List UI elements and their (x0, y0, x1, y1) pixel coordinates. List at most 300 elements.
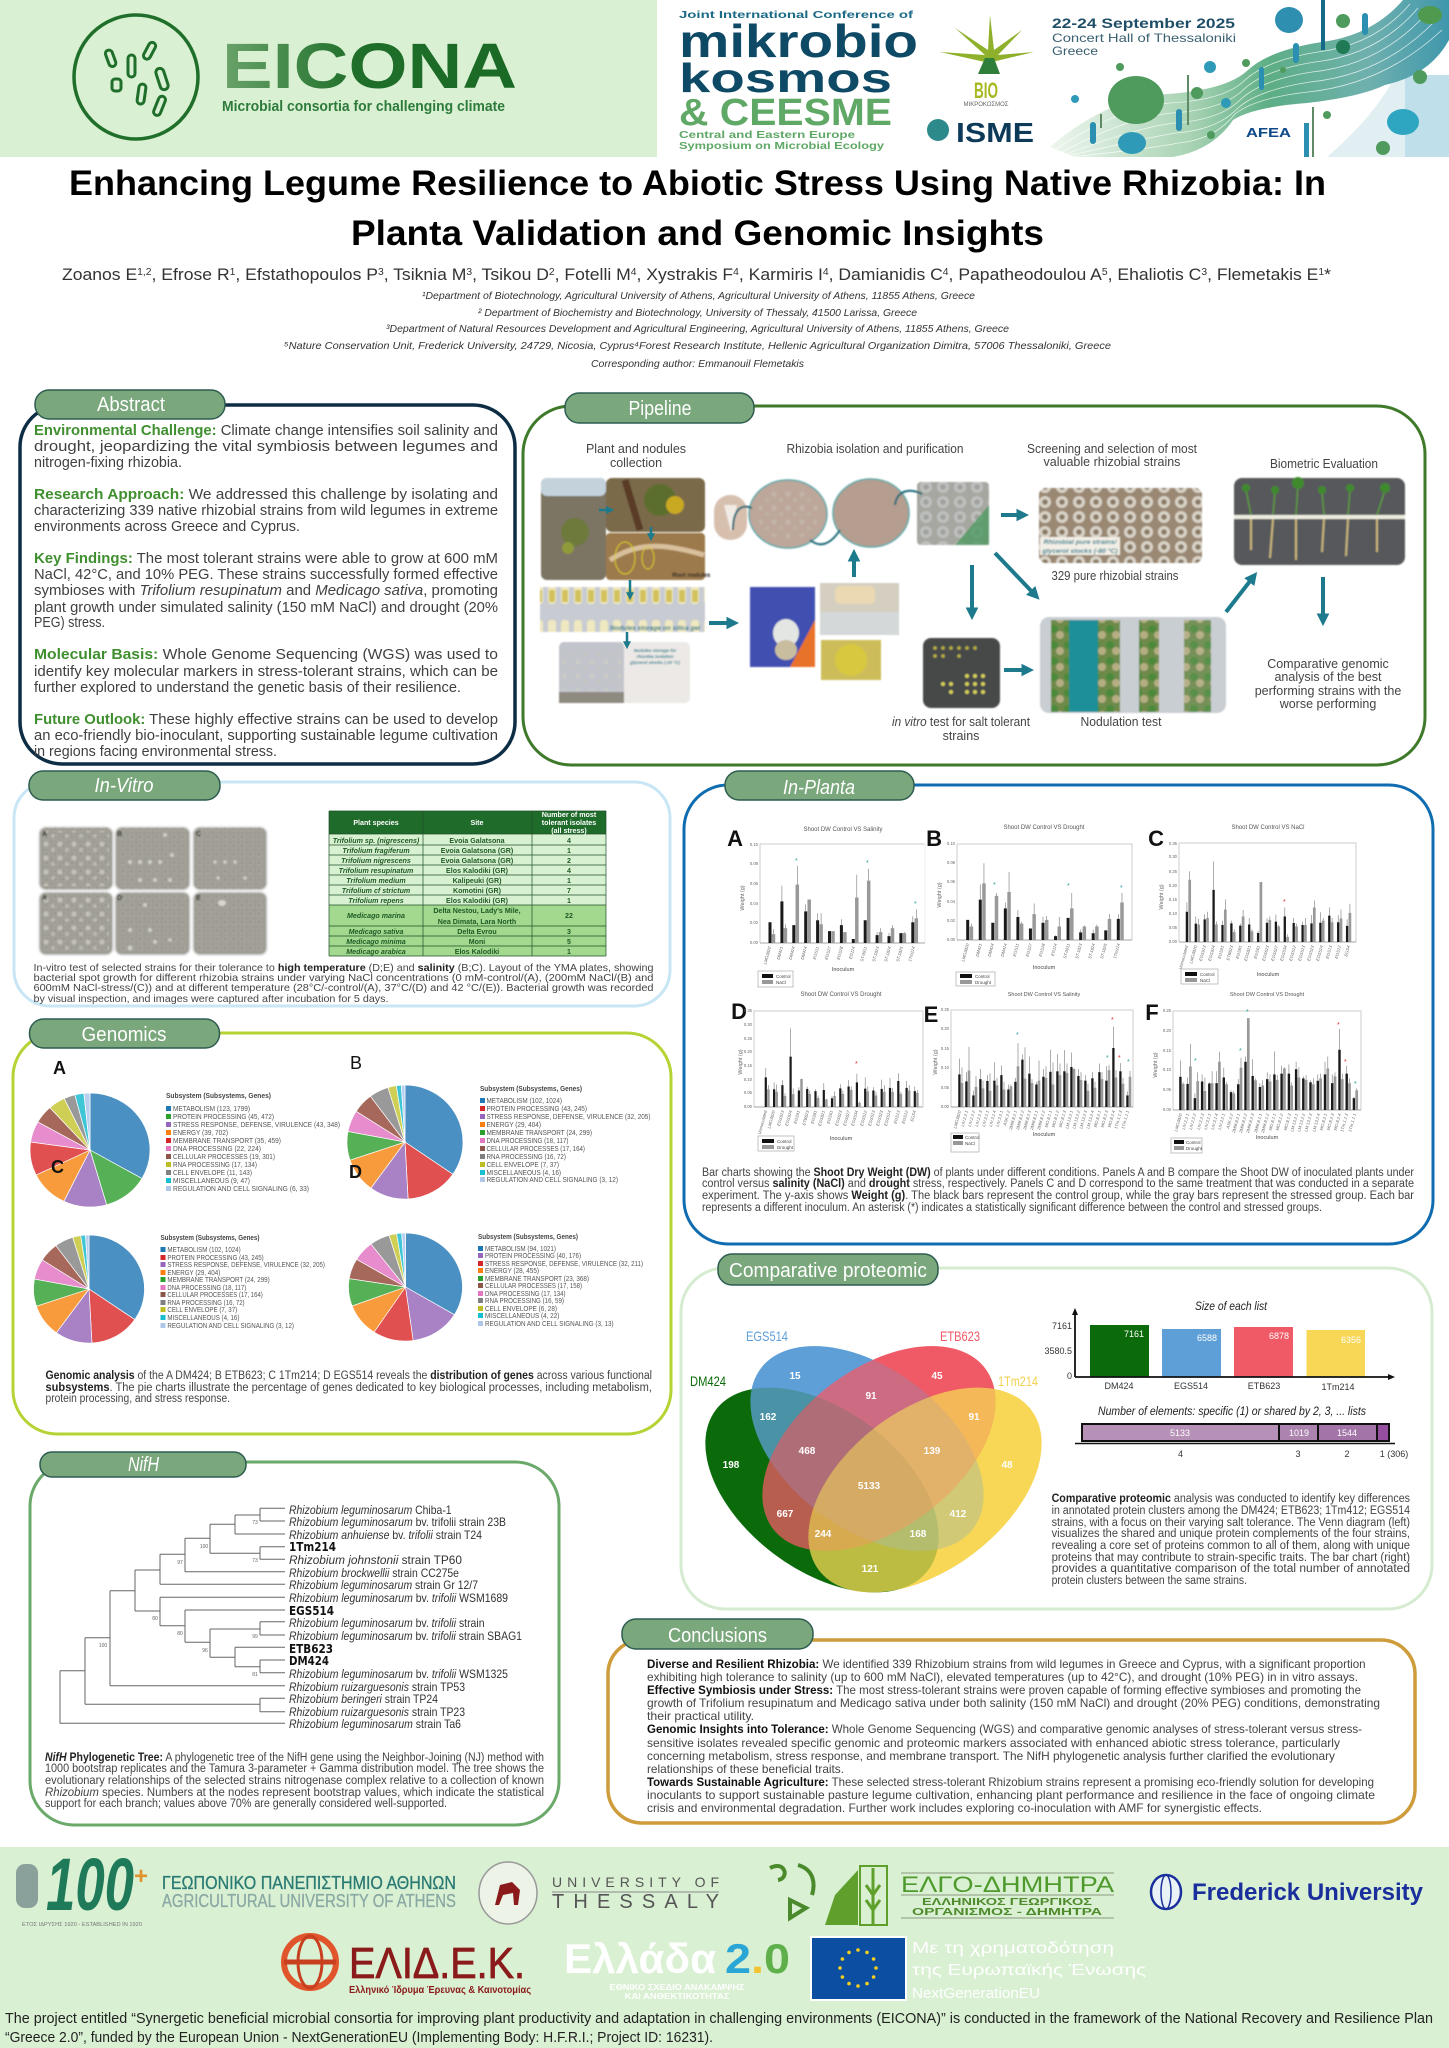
legend D: Subsystem (Subsystems, Genes) (478, 1234, 578, 1241)
table: tolerant isolates: Kalipeuki (GR) (453, 877, 502, 885)
bar chart A: EGS27 (824, 945, 832, 960)
conference name text: kosmos (679, 55, 892, 101)
stacked bar: shared elements: 1 (306) (1380, 1449, 1408, 1459)
authors: , Xystrakis F (637, 265, 733, 284)
bootstrap values: 99 (252, 1634, 258, 1640)
table: tolerant isolates: 3 (567, 928, 571, 936)
authors: , Fotelli M (555, 265, 631, 284)
bar chart C: EGS627 (1270, 944, 1279, 962)
bar chart F: 1Tm.1.1.3 (1339, 1112, 1349, 1132)
caption: in-planta: represents a different inoculum. An asterisk (*) indicates a statistically significant difference between the control and stressed groups. (702, 1202, 1322, 1214)
abstract text: drought, jeopardizing the vital symbiosis between legumes and (34, 438, 498, 455)
bar chart A: 0.02 (750, 920, 759, 925)
icon: mikrobiokosmos plant logo: BIO (974, 78, 998, 103)
bar chart D: 0.25 (744, 1036, 753, 1041)
heading: in-planta (725, 771, 914, 800)
bar chart C: Inoculum (1257, 972, 1280, 978)
authors: , Flemetakis E (1207, 265, 1318, 284)
tree taxa labels: 1Tm214 (289, 1540, 336, 1554)
venn diagram: DM424 (690, 1373, 726, 1389)
step label: plant and nodules collection: Plant and nodules (586, 442, 686, 456)
bar chart B: Control (975, 974, 990, 979)
bar chart E: 2MM.8.1.2 (1036, 1109, 1046, 1131)
label: comparative genomic analysis: Comparative genomic (1267, 657, 1389, 671)
conference date and place (1052, 15, 1292, 140)
affiliations: ¹Department of Biotechnology, Agricultural University of Athens, Agricultural University of Athens, 11855 Athens, Greece (422, 290, 975, 302)
bar chart B (926, 825, 1132, 986)
heading: in-vitro: In-Vitro (94, 775, 154, 797)
bar chart F: LIV.2.2.2 (1188, 1112, 1197, 1130)
bar chart: size of each list: 1Tm214 (1321, 1382, 1355, 1392)
venn diagram: 15 (789, 1371, 801, 1382)
affiliations: ⁵Nature Conservation Unit, Frederick University, 24729, Nicosia, Cyprus⁴Forest Research Institute, Hellenic Agricultural Organization Dimitra, 57006 Thessaloniki, Greece (284, 340, 1111, 352)
table: tolerant isolates: 1 (567, 877, 571, 885)
phylogenetic tree branches (60, 1508, 285, 1723)
bar chart F: LIV.3.2.1 (1217, 1113, 1226, 1130)
logo: Greece 2.0: Ελλάδα (564, 1935, 716, 1982)
caption: comparative proteomic: revealing a core set of proteins common to all of them, along with unique (1052, 1540, 1410, 1552)
bar chart C: EGS12 (1334, 944, 1342, 959)
bar chart: size of each list: ETB623 (1248, 1381, 1280, 1391)
bar chart B: EGS28 (1038, 942, 1046, 957)
bar chart E: LIV.3.1.4 (988, 1109, 997, 1127)
legend B: MISCELLANEOUS (4, 16) (486, 1170, 561, 1177)
caption: in-vitro: bacterial spot growth for different rhizobia strains under varying NaCl concentrations (0 mM-control/(A), (200mM NaCl/(B) and (34, 972, 654, 984)
caption: nifH: evolutionary relationships of the selected strains nitrogenase complex relative to a collection of known (45, 1775, 544, 1787)
decorative wave (1050, 0, 1449, 157)
bar chart B: DM424 (987, 942, 995, 957)
authors: 3 (1201, 267, 1208, 278)
step label: plant and nodules collection (586, 442, 686, 470)
venn diagram: 412 (950, 1509, 967, 1520)
bar chart F: 0.25 (1163, 1008, 1172, 1013)
photos: isolation (750, 583, 899, 680)
table: tolerant isolates: 1 (567, 897, 571, 905)
caption: in-vitro (34, 962, 654, 1005)
bar chart F: * (1354, 1081, 1357, 1088)
logo: Agricultural University of Athens: + (134, 1863, 148, 1890)
abstract text: plant growth under simulated salinity (150 mM NaCl) and drought (20% (34, 599, 498, 616)
label: nodulation test: Nodulation test (1080, 715, 1162, 729)
abstract text: symbioses with Trifolium resupinatum and Medicago sativa, promoting (34, 582, 498, 599)
bootstrap values: 80 (152, 1616, 158, 1622)
bar chart F: MO.8.1.2 (1275, 1112, 1284, 1131)
legend A: ENERGY (39, 702) (173, 1130, 228, 1137)
icon: mikrobiokosmos plant logo: ΜΙΚΡΟΚΟΣΜΟΣ (964, 102, 1009, 108)
legend C: ENERGY (29, 404) (167, 1270, 220, 1277)
bar chart E: 2MM.8.2.3 (1022, 1109, 1032, 1131)
bar chart E: 0.15 (941, 1046, 950, 1051)
bar chart D: 0.05 (744, 1090, 753, 1095)
caption: comparative proteomic: proteins that may contribute to strain-specific traits. The bar chart (right) (1052, 1552, 1410, 1564)
authors: , Efrose R (152, 265, 230, 284)
heading: comparative proteomic (718, 1254, 938, 1285)
bar chart C: EGS61 (1253, 945, 1261, 959)
title (69, 164, 1326, 253)
legend D: MEMBRANE TRANSPORT (23, 368) (485, 1276, 589, 1283)
legend B: RNA PROCESSING (16, 72) (486, 1154, 566, 1161)
bar chart D: EGS627 (842, 1109, 851, 1127)
bar chart D: EGS523 (875, 1109, 884, 1127)
bar chart E: LM.13.2.2 (1071, 1109, 1081, 1129)
table: tolerant isolates: Delta Nestou, Lady's Mile, (433, 907, 521, 915)
tree taxa labels: Rhizobium leguminosarum bv. trifolii strain (289, 1616, 484, 1630)
bar chart F: * (1194, 1058, 1197, 1065)
tree taxa labels: Rhizobium brockwellii strain CC275e (289, 1566, 459, 1580)
logo: EU NextGenerationEU flag: Με τη χρηματοδότηση (912, 1940, 1114, 1957)
photos: plant collection (541, 478, 711, 580)
bar chart F: LMG3820 (1173, 1112, 1183, 1132)
bar chart A: EG114 (848, 945, 856, 960)
bar chart D: Inoculum (830, 1136, 853, 1142)
bar chart F: LIV.3.1.1 (1203, 1113, 1212, 1130)
bar chart: size of each list: 7161 (1052, 1321, 1072, 1331)
conclusions text: crisis and environmental degradation. Further work includes exploring co-inoculation with AMF for synergistic effects. (647, 1801, 1262, 1815)
legend B: STRESS RESPONSE, DEFENSE, VIRULENCE (32, 205) (486, 1114, 650, 1121)
caption: comparative proteomic: in annotated protein clusters among the DM424; ETB623; 1Tm412; EGS514 (1052, 1505, 1411, 1517)
legend A: METABOLISM (123, 1799) (173, 1106, 250, 1113)
bar chart B: EGS11 (1012, 943, 1020, 957)
conclusions text: sensitive isolates revealed specific genomic and proteomic markers associated with enhanced abiotic stress tolerance, particularly (647, 1736, 1340, 1750)
bar chart F: Weight (g) (1153, 1052, 1159, 1078)
caption: in-planta: control versus salinity (NaCl) and drought stress, respectively. Panels C and D correspond to the same treatment that was conducted in a separate (702, 1178, 1414, 1190)
abstract text (34, 422, 498, 760)
legend B: DNA PROCESSING (18, 117) (486, 1138, 568, 1145)
bar chart F: MO.8.1.1 (1268, 1113, 1277, 1131)
legend D: DNA PROCESSING (17, 134) (485, 1291, 566, 1298)
bar chart B: * (1120, 885, 1123, 892)
table: tolerant isolates: Medicago marina (347, 912, 405, 920)
bar chart F (1145, 992, 1361, 1153)
bar chart A: 0.10 (750, 842, 759, 847)
bar chart E: 0.20 (941, 1026, 950, 1031)
bar chart A: ST-0911 (859, 946, 868, 962)
caption: nifH: 1000 bootstrap replicates and the Tamura 3-parameter + Gamma distribution model. The tree shows the (45, 1763, 544, 1775)
bar chart D: 0.20 (744, 1049, 753, 1054)
bar chart A: * (795, 858, 798, 865)
abstract text: Environmental Challenge: Climate change intensifies soil salinity and (34, 422, 498, 439)
legend B: CELL ENVELOPE (7, 37) (486, 1162, 559, 1169)
footer band with partner logos (0, 1843, 1449, 2048)
table: tolerant isolates: Evoia Galatsona (GR) (441, 857, 514, 865)
bar chart B: ST-0911 (1062, 943, 1071, 959)
bar chart F: MO.8.2.3 (1326, 1112, 1335, 1131)
photo: nodule tubes on silica gel: Nodules storage on silica gel (610, 625, 700, 632)
venn diagram: ETB623 (940, 1328, 980, 1344)
legend D: CELLULAR PROCESSES (17, 158) (485, 1283, 582, 1290)
photo: glycerol stock plate: Nodules storage for (634, 648, 676, 653)
bar chart D: EGS513 (867, 1109, 876, 1127)
bar chart F: LM.13.2.4 (1311, 1112, 1321, 1132)
table: tolerant isolates: Trifolium repens (348, 897, 404, 905)
bar chart C: EGS913 (1198, 944, 1207, 962)
legend A: CELLULAR PROCESSES (19, 301) (173, 1154, 275, 1161)
bootstrap values: 100 (99, 1643, 107, 1649)
bar chart A: DM414 (800, 945, 808, 960)
heading: genomics (30, 1019, 220, 1048)
logo: Greece 2.0: 2.0 (725, 1935, 790, 1982)
legend A: STRESS RESPONSE, DEFENSE, VIRULENCE (43, 348) (173, 1122, 340, 1129)
bar chart: size of each list: DM424 (1104, 1381, 1134, 1391)
heading: pipeline: Pipeline (628, 398, 692, 420)
venn diagram: 162 (760, 1412, 777, 1423)
bar chart F: * (1246, 1009, 1249, 1016)
bootstrap values: 73 (252, 1558, 258, 1564)
bar chart F: MO.8.2.1 (1319, 1113, 1328, 1131)
bar chart B: 0.08 (947, 860, 956, 865)
authors: 4 (733, 267, 739, 278)
logo: University of Thessaly: UNIVERSITY OF (552, 1874, 719, 1890)
bar chart D: EGS91 (793, 1110, 801, 1124)
authors: , Papatheodoulou A (949, 265, 1103, 284)
bar chart E: MO.8.1.3 (1058, 1109, 1067, 1128)
bar chart E: * (1106, 1055, 1109, 1062)
bar chart B: DM414 (1000, 942, 1008, 957)
caption: nifH: Rhizobium species. Numbers at the nodes represent bootstrap values, which indicate the statistical (45, 1787, 544, 1799)
bar chart F: Shoot DW Control VS Drought (1230, 992, 1305, 998)
bar chart F: 2MM.8.2.2 (1238, 1112, 1248, 1134)
caption: comparative proteomic (1052, 1493, 1411, 1587)
bar chart D: EGS13 (893, 1109, 901, 1124)
authors: 1 (230, 267, 236, 278)
bar chart B: B (926, 826, 942, 851)
conference name text (679, 9, 918, 152)
bar chart A: A (727, 826, 743, 851)
photo: glycerol stock plate: rhizobia isolation (636, 654, 674, 659)
bar chart A: * (914, 901, 917, 908)
logo: HFRI ELIDEK: Ελληνικό Ίδρυμα Έρευνας & Καινοτομίας (349, 1985, 531, 1996)
bar chart C: NaCl (1200, 978, 1210, 983)
bar chart F: LIV.2.2.1 (1181, 1113, 1190, 1130)
table: tolerant isolates: 4 (567, 837, 571, 845)
conclusions text: concerning metabolism, stress response, and membrane transport. The NifH phylogenetic analysis further clarified the evolutionary (647, 1749, 1335, 1763)
caption: in-planta (702, 1167, 1414, 1214)
bar chart E: * (1127, 1059, 1130, 1066)
logo: University of Thessaly (479, 1862, 719, 1924)
pie chart D (348, 1233, 462, 1341)
bar chart E: LM.13.2.4 (1085, 1109, 1095, 1129)
bar chart D: Drought (777, 1145, 794, 1150)
photo grid: YMA plates: B (117, 831, 122, 838)
table: tolerant isolates: Plant species (353, 819, 399, 827)
conclusions text: their practical utility. (647, 1709, 754, 1723)
bar chart E: 2MM.8.2.1 (1008, 1110, 1018, 1131)
table: tolerant isolates: 7 (567, 887, 571, 895)
table: tolerant isolates: Trifolium fragiferum (342, 847, 410, 855)
venn diagram: 91 (968, 1412, 980, 1423)
authors: 4 (823, 267, 829, 278)
bar chart D: * (855, 1061, 858, 1068)
bar chart D: D (731, 999, 747, 1024)
bar chart D: EGS821 (817, 1110, 826, 1127)
bootstrap values (99, 1520, 258, 1678)
bar chart E: LMG3820 (952, 1109, 962, 1129)
photo: pure strain racks (1039, 488, 1202, 563)
bar chart A (727, 826, 925, 987)
table: tolerant isolates: Delta Evrou (457, 928, 497, 936)
legend C: RNA PROCESSING (16, 72) (167, 1300, 245, 1307)
panel: in-planta (684, 771, 1433, 1244)
legend B: CELLULAR PROCESSES (17, 164) (486, 1146, 585, 1153)
bar chart C: EGS81 (1235, 945, 1243, 959)
bar chart C: 0.10 (1169, 911, 1178, 916)
bar chart C: * (1283, 899, 1286, 906)
authors: , Karmiris I (739, 265, 823, 284)
heading: in-planta: In-Planta (783, 777, 855, 799)
title: Planta Validation and Genomic Insights (351, 214, 1044, 253)
tree taxa labels: Rhizobium leguminosarum strain Ta6 (289, 1717, 461, 1731)
authors: 3 (378, 267, 384, 278)
stacked bar: shared elements: Number of elements: specific (1) or shared by 2, 3, ... lists (1098, 1404, 1366, 1418)
tree taxa labels: Rhizobium anhuiense bv. trifolii strain T24 (289, 1528, 482, 1542)
bar chart E: LIV.2.2.1 (960, 1110, 969, 1127)
bar chart E: 0.25 (941, 1007, 950, 1012)
heading: pipeline (565, 393, 754, 423)
bar chart D: 0.15 (744, 1063, 753, 1068)
heading: abstract: Abstract (97, 394, 165, 416)
bar chart A: 0.04 (750, 901, 759, 906)
bar chart F: 2MM.8.1.1 (1253, 1113, 1263, 1134)
affiliations (284, 290, 1111, 370)
tree taxa labels: Rhizobium leguminosarum strain Gr 12/7 (289, 1578, 478, 1592)
bar chart: size of each list: 6878 (1269, 1331, 1289, 1341)
bar chart D: Shoot DW Control VS Drought (800, 992, 882, 998)
table: tolerant isolates: Trifolium sp. (nigrescens) (333, 837, 420, 845)
venn diagram: 45 (931, 1371, 943, 1382)
caption: comparative proteomic: protein clusters between the same strains. (1052, 1575, 1247, 1587)
heading: nifH: NifH (128, 1454, 159, 1476)
authors: 5 (1102, 267, 1108, 278)
bar chart D: Control (777, 1139, 792, 1144)
bar chart D: Weight (g) (738, 1049, 744, 1075)
bootstrap values: 73 (252, 1520, 258, 1526)
bar chart F: 0.10 (1163, 1067, 1172, 1072)
logo: ELGO Dimitra: ΟΡΓΑΝΙΣΜΟΣ - ΔΗΜΗΤΡΑ (912, 1907, 1102, 1918)
venn diagram: 168 (910, 1529, 927, 1540)
caption: genomics: Genomic analysis of the A DM424; B ETB623; C 1Tm214; D EGS514 reveals the distribution of genes across various functional (46, 1370, 652, 1382)
photo grid: YMA plates: C (196, 831, 201, 838)
label: comparative genomic analysis (1255, 657, 1401, 711)
label: comparative genomic analysis: worse performing (1279, 697, 1376, 711)
table: tolerant isolates: Moni (469, 938, 485, 946)
label: in vitro test (892, 715, 1030, 743)
conference name text: mikrobio (679, 15, 918, 67)
bar chart F: 0.00 (1163, 1107, 1172, 1112)
table: tolerant isolates: Elos Kalodiki (GR) (446, 897, 509, 905)
legend C: DNA PROCESSING (18, 117) (167, 1285, 246, 1292)
panel: in-vitro (14, 771, 670, 1006)
bar chart F: * (1337, 1022, 1340, 1029)
legend C: PROTEIN PROCESSING (43, 245) (167, 1255, 264, 1262)
ISME logo: ISME (956, 117, 1034, 148)
logo: ELGO Dimitra: ΕΛΛΗΝΙΚΟΣ ΓΕΩΡΓΙΚΟΣ (922, 1897, 1092, 1908)
label: in vitro test: strains (943, 729, 979, 743)
table: tolerant isolates: 22 (565, 912, 573, 920)
bar chart C: 0.20 (1169, 883, 1178, 888)
bar chart D (731, 992, 923, 1151)
bar chart B: * (993, 882, 996, 889)
logo: Frederick University (1151, 1875, 1424, 1909)
logo: EU NextGenerationEU flag: της Ευρωπαϊκής Ένωσης (912, 1962, 1146, 1979)
step label: plant and nodules collection: collection (610, 456, 662, 470)
step label: screening (1027, 442, 1197, 469)
logo: HFRI ELIDEK (284, 1936, 531, 1996)
conclusions text: inoculants to support sustainable pasture legume cultivation, enhancing plant performance and resilience in the face of ongoing climate (647, 1788, 1375, 1802)
conclusions text: growth of Trifolium resupinatum and Medicago sativa under both salinity (150 mM NaCl) and drought (20% PEG) conditions, demonstrating (647, 1696, 1380, 1710)
table: tolerant isolates: tolerant isolates (542, 819, 596, 827)
header banner: EICONA project logo (0, 0, 657, 157)
bar chart F: MO.8.1.3 (1283, 1112, 1292, 1131)
bar chart E: 0.05 (941, 1085, 950, 1090)
bar chart B: ST-1823 (1074, 942, 1083, 959)
table: tolerant isolates: Elos Kalodiki (GR) (446, 867, 509, 875)
bar chart B: Shoot DW Control VS Drought (1003, 825, 1085, 831)
logo: University of Thessaly: THESSALY (552, 1891, 719, 1913)
bar chart E: 0.00 (941, 1104, 950, 1109)
photos: plant collection: Root nodules (672, 573, 711, 579)
legend A: MEMBRANE TRANSPORT (35, 459) (173, 1138, 281, 1145)
panel: nifH (30, 1452, 559, 1825)
venn diagram: 48 (1001, 1460, 1013, 1471)
bar chart C: C (1148, 826, 1164, 851)
bar chart D: EGS61 (826, 1110, 834, 1124)
abstract text: environments across Greece and Cyprus. (34, 518, 300, 535)
abstract text: Key Findings: The most tolerant strains were able to grow at 600 mM (34, 550, 498, 567)
authors: Zoanos E (62, 265, 135, 284)
tree taxa labels: Rhizobium leguminosarum bv. trifolii strain 23B (289, 1515, 506, 1529)
affiliations: ³Department of Natural Resources Development and Agricultural Engineering, Agricultural University of Athens, 11855 Athens, Greece (386, 323, 1009, 335)
conclusions text: relationships of these beneficial traits. (647, 1762, 844, 1776)
bar chart F: * (1239, 1048, 1242, 1055)
tree taxa labels: Rhizobium ruizarguesonis strain TP23 (289, 1705, 465, 1719)
bar chart F: 0.20 (1163, 1028, 1172, 1033)
bar chart B: 0.00 (947, 937, 956, 942)
photo grid: YMA plates: E (196, 895, 201, 902)
bar chart B: DM421 (975, 943, 983, 957)
bar chart E: E (924, 1002, 938, 1027)
conclusions text: Diverse and Resilient Rhizobia: We identified 339 Rhizobium strains from wild legumes in Greece and Cyprus, with a significant proportion (647, 1657, 1366, 1671)
table: tolerant isolates: Site (470, 819, 484, 827)
bar chart C: 0.00 (1169, 939, 1178, 944)
tree taxa labels: Rhizobium ruizarguesonis strain TP53 (289, 1680, 465, 1694)
bar chart B: EG114 (1050, 942, 1058, 957)
legend C (160, 1235, 325, 1330)
bar chart C: 0.25 (1169, 869, 1178, 874)
legend C: MEMBRANE TRANSPORT (24, 299) (167, 1277, 270, 1284)
conclusions text: Genomic Insights into Tolerance: Whole Genome Sequencing (WGS) and comparative genomic analyses of stress-tolerant versus stress- (647, 1722, 1362, 1736)
conclusions text: Effective Symbiosis under Stress: The most stress-tolerant strains were proven capable of forming effective symbioses and promoting the (647, 1683, 1361, 1697)
authors: , Tsiknia M (384, 265, 466, 284)
bar chart C: EGS514 (1315, 944, 1324, 962)
conference date and place: AFEA (1246, 125, 1292, 140)
bar chart C: LMG3820 (1188, 944, 1198, 964)
bar chart E: Weight (g) (933, 1049, 939, 1075)
bar chart F: 2MM.8.1.2 (1260, 1112, 1270, 1134)
photo: glycerol stock plate: glycerol stocks (-20 °C) (629, 660, 680, 665)
bar chart A: EGS11 (812, 946, 820, 960)
affiliations: Corresponding author: Emmanouil Flemetakis (591, 358, 805, 370)
bar chart D: EGS81 (810, 1110, 818, 1124)
authors: 2 (549, 267, 555, 278)
venn diagram (668, 1305, 1079, 1634)
bar chart B: * (1067, 883, 1070, 890)
step label: screening: valuable rhizobial strains (1044, 455, 1180, 469)
bar chart E: LIV.2.2.2 (967, 1109, 976, 1127)
bar chart F: * (1344, 1059, 1347, 1066)
bar chart D: EGS623 (834, 1109, 843, 1127)
bar chart: size of each list: 3580.5 (1044, 1346, 1072, 1356)
bar chart F: LIV.3.1.4 (1210, 1112, 1219, 1130)
